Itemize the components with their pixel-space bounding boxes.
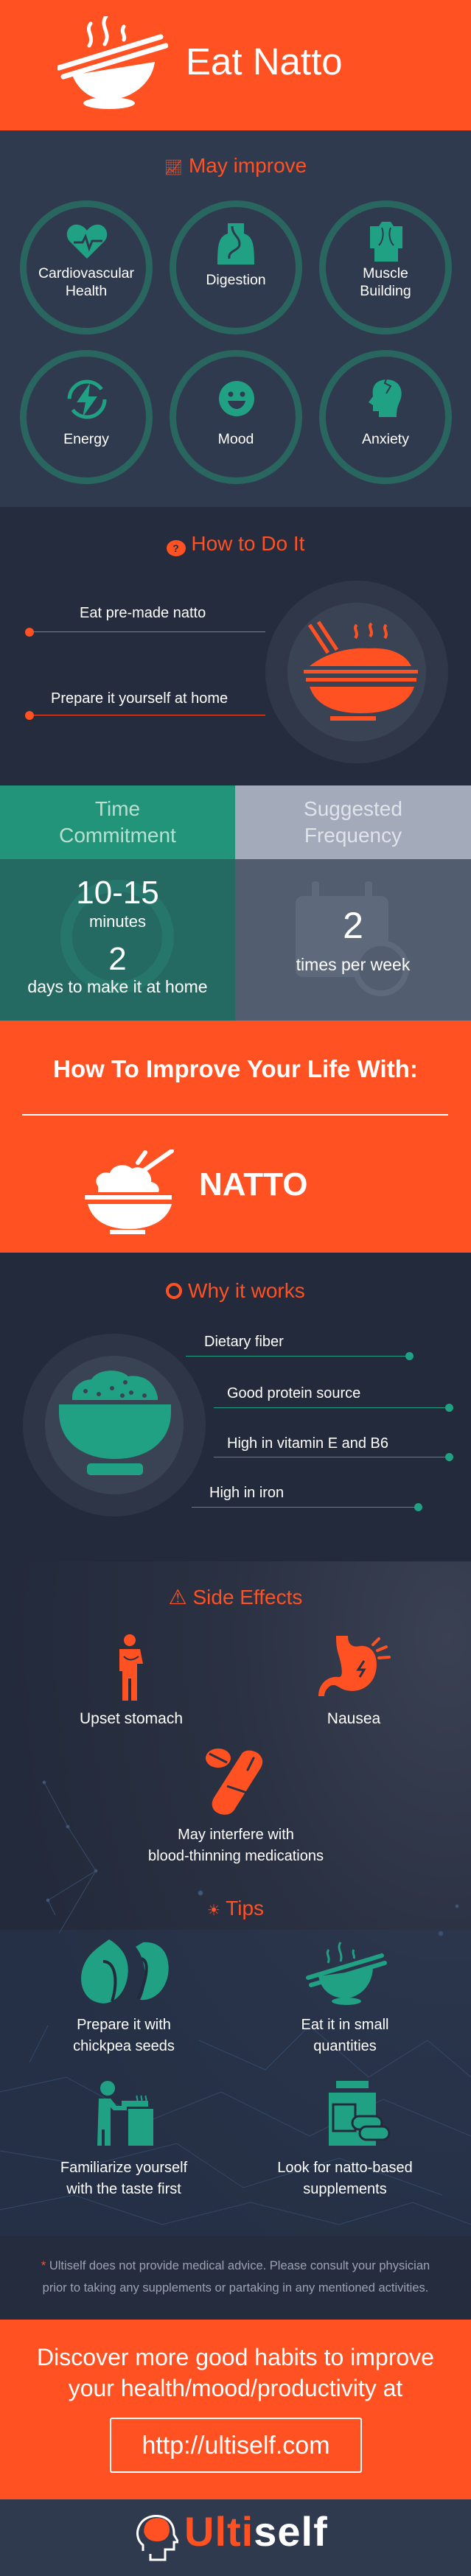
option: prepare at home [25,690,265,720]
cta text [37,2344,434,2401]
benefit: cardiovascular: Cardiovascular [38,265,134,281]
tip: supplements: Look for natto-based [277,2160,413,2176]
cta text: your health/mood/productivity at [69,2375,402,2401]
tip: familiarize: with the taste first [66,2181,181,2197]
header [0,0,471,130]
heading: How To Improve Your Life With: [53,1055,418,1082]
tip: chickpea seeds: chickpea seeds [73,2038,175,2054]
benefit: muscle building [319,200,452,335]
reason: protein [214,1385,453,1412]
panel: time commitment: Time [95,797,140,820]
panel: time commitment: days to make it at home [27,977,208,996]
option: prepare at home: Prepare it yourself at home [51,690,228,707]
benefit: digestion: Digestion [206,272,266,288]
reason: iron [192,1485,422,1511]
icon: natto bowl [85,1149,174,1234]
side effect: blood thinners: blood-thinning medications [148,1848,324,1864]
tip: supplements [277,2081,413,2197]
benefit: mood: Mood [218,431,254,447]
benefit: digestion [170,200,302,335]
panel: time commitment: 10-15 [76,875,159,911]
heading: why it works: Why it works [188,1279,305,1302]
disclaimer: * Ultiself does not provide medical advice. Please consult your physician [41,2259,430,2272]
label: natto: NATTO [199,1166,307,1203]
title: Eat Natto [186,41,343,83]
panel: why it works [0,1253,471,1561]
benefit: anxiety: Anxiety [362,431,409,447]
panel: time commitment: Commitment [59,824,176,847]
reason: dietary fiber [186,1334,414,1360]
tip: small quantities: quantities [313,2038,377,2054]
tip: familiarize [60,2081,187,2197]
reason: vitamins [214,1435,453,1461]
tip: supplements: supplements [303,2181,387,2197]
side effect: blood thinners: May interfere with [178,1827,294,1843]
panel: how to improve your life with natto [0,1021,471,1253]
footer logo band [0,2499,471,2576]
icon: bowl with chopsticks [57,16,168,109]
heading: may improve: 📈︎ May improve [164,154,307,177]
option: eat pre-made [25,605,265,637]
icon: calendar watermark [296,881,409,996]
side effect: upset stomach: Upset stomach [80,1710,183,1727]
benefit: muscle building: Building [360,283,411,299]
tip: familiarize: Familiarize yourself [60,2160,187,2176]
tip: chickpea seeds: Prepare it with [77,2017,171,2033]
reason: protein: Good protein source [227,1385,360,1401]
option: eat pre-made: Eat pre-made natto [80,605,206,621]
cta text: Discover more good habits to improve [37,2344,434,2370]
tip: small quantities [301,1942,388,2054]
panel: how to do it [0,507,471,785]
panel: suggested frequency: times per week [296,955,410,974]
panel: time commitment: 2 [108,941,127,977]
benefit: cardiovascular [20,200,153,335]
panel: time commitment: minutes [89,912,146,931]
side effect: blood thinners [148,1749,324,1864]
heading: side effects: ⚠︎ Side Effects [169,1586,302,1609]
benefit: energy [20,350,153,484]
panel: suggested frequency [235,785,471,1021]
benefit: mood [170,350,302,484]
illustration: bowl in circles [265,581,448,763]
heading: how to do it: ? [172,542,179,554]
disclaimer: prior to taking any supplements or partaking in any mentioned activities. [43,2281,428,2295]
heading: tips: ☀︎ Tips [207,1897,264,1919]
benefit: muscle building: Muscle [363,265,408,281]
heading: how to do it: How to Do It [191,532,304,555]
tip: chickpea seeds [73,1939,175,2054]
panel: suggested frequency: Suggested [304,797,402,820]
panel: side effects and tips background [0,1561,471,2320]
panel: suggested frequency: 2 [343,905,363,946]
reason: vitamins: High in vitamin E and B6 [227,1435,388,1452]
illustration: teal bowl [23,1334,206,1516]
logo: brain icon [136,2515,178,2561]
benefit: energy: Energy [63,431,109,447]
side effect: nausea: Nausea [327,1710,380,1727]
disclaimer [0,2236,471,2320]
panel: time commitment [0,785,235,1021]
button: url [110,2418,362,2473]
reason: iron: High in iron [209,1485,284,1501]
side effect: nausea [318,1636,391,1727]
benefit: cardiovascular: Health [66,283,107,299]
panel: may improve [0,130,471,507]
reason: dietary fiber: Dietary fiber [204,1334,284,1350]
button: url: http://ultiself.com [142,2432,330,2460]
tip: small quantities: Eat it in small [301,2017,388,2033]
panel: suggested frequency: Frequency [304,824,402,847]
side effect: upset stomach [80,1634,183,1727]
benefit: anxiety [319,350,452,484]
footer call to action [0,2320,471,2499]
logo: wordmark: Ultiself [184,2508,328,2555]
